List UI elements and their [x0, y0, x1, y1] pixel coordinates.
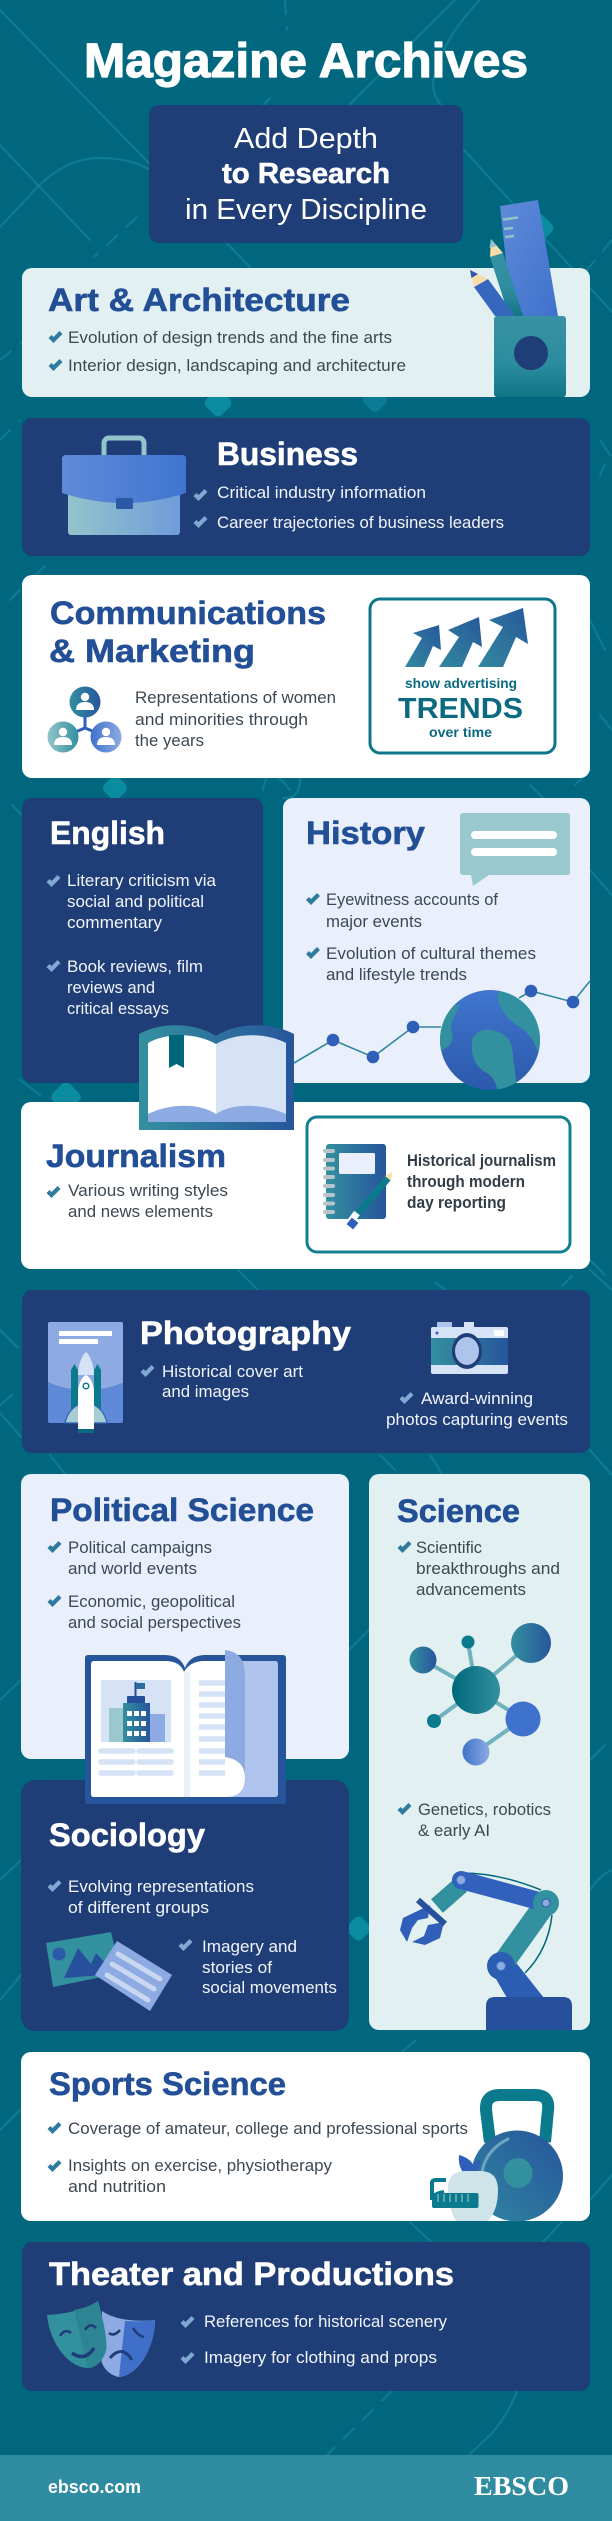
heading: photography: Photography [140, 1315, 351, 1351]
heading: english: English [50, 815, 165, 851]
heading: sports science: Sports Science [49, 2066, 286, 2102]
bullet: book reviews [46, 957, 203, 1018]
logo: EBSCO: EBSCO [474, 2471, 569, 2501]
bullet: breakthroughs: breakthroughs and [416, 1559, 560, 1578]
bullet: clothing and props: Imagery for clothing and props [204, 2348, 437, 2367]
heading: journalism: Journalism [46, 1138, 226, 1174]
bullet: design trends: Evolution of design trends and the fine arts [68, 328, 392, 347]
heading: communications and marketing [49, 595, 326, 669]
icon: open book with bookmark [139, 1025, 294, 1130]
bullet: career trajectories: Career trajectories of business leaders [217, 513, 504, 532]
icon: molecule [410, 1623, 551, 1766]
bullet: award-winning photos: photos capturing events [386, 1410, 568, 1429]
heading: political science: Political Science [50, 1492, 314, 1528]
bullet: eyewitness accounts: Eyewitness accounts of [326, 890, 498, 909]
bullet: book reviews: critical essays [67, 999, 169, 1018]
panel: sports science [21, 2052, 590, 2222]
bullet: genetics [398, 1800, 551, 1840]
bullet: eyewitness accounts [306, 890, 498, 931]
bullet: industry information: Critical industry information [217, 483, 426, 502]
heading: communications and marketing: & Marketing [49, 633, 255, 669]
panel: photography [16, 1290, 590, 1453]
bullet: exercise insights [48, 2156, 332, 2196]
subtitle box: in Every Discipline [185, 194, 427, 226]
icon: camera [431, 1322, 508, 1374]
panel: journalism [21, 1102, 590, 1269]
bullet: interior design: Interior design, landscaping and architecture [68, 356, 406, 375]
bullet: award-winning photos [386, 1389, 568, 1429]
callout: advertising trends: show advertising [405, 675, 517, 691]
icon: connected people [48, 686, 122, 752]
bullet: writing styles: Various writing styles [68, 1181, 228, 1200]
panel: science [369, 1474, 590, 2030]
bullet: book reviews: reviews and [67, 978, 155, 997]
heading: art and architecture: Art & Architecture [48, 282, 350, 318]
heading: theater and productions: Theater and Productions [49, 2256, 454, 2292]
bullet: exercise insights: and nutrition [68, 2177, 166, 2196]
bullet: coverage: Coverage of amateur, college and professional sports [68, 2119, 468, 2138]
text: historical journalism: day reporting [407, 1193, 506, 1212]
callout: advertising trends [370, 599, 555, 753]
bullet: writing styles: and news elements [68, 1202, 213, 1221]
bullet: social movements: Imagery and [202, 1937, 297, 1956]
text: representations [135, 688, 336, 750]
bullet: exercise insights: Insights on exercise, physiotherapy [68, 2156, 332, 2175]
panel: communications and marketing [22, 575, 590, 778]
bullet: breakthroughs: Scientific [416, 1538, 482, 1557]
line chart [294, 981, 590, 1063]
panel: history [283, 798, 590, 1095]
icon: pencil cup [470, 200, 566, 397]
icon: notebook and pen [325, 1144, 392, 1228]
text: representations: the years [135, 731, 204, 750]
bullet: representations: Evolving representations [68, 1877, 254, 1896]
heading: history: History [306, 815, 425, 851]
bullet: cover art: and images [162, 1382, 249, 1401]
bullet: writing styles [46, 1181, 228, 1221]
bullet: literary criticism: social and political [67, 892, 204, 911]
icon: robot arm [400, 1873, 572, 2030]
icon: rising arrows [405, 608, 528, 667]
callout: advertising trends: over time [429, 724, 492, 740]
bullet: historical scenery: References for historical scenery [204, 2312, 447, 2331]
icon: briefcase [62, 438, 186, 535]
bullet: cultural themes [306, 944, 536, 984]
heading: business: Business [217, 436, 358, 472]
bullet: perspectives: and social perspectives [68, 1613, 241, 1632]
bullet: social movements: social movements [202, 1978, 337, 1997]
heading: sociology: Sociology [49, 1817, 205, 1853]
bullet: genetics: Genetics, robotics [418, 1800, 551, 1819]
bullet: book reviews: Book reviews, film [67, 957, 203, 976]
bullet: genetics: & early AI [418, 1821, 490, 1840]
icon: speech bubble [460, 813, 570, 886]
bullet: literary criticism: Literary criticism via [67, 871, 217, 890]
bullet: award-winning photos: Award-winning [421, 1389, 533, 1408]
subtitle box [149, 105, 463, 243]
icon: open magazine [85, 1650, 286, 1804]
bullet: cover art: Historical cover art [162, 1362, 303, 1381]
bullet: eyewitness accounts: major events [326, 912, 422, 931]
subtitle box: Add Depth [234, 123, 378, 155]
title: Magazine Archives [84, 35, 528, 88]
bullet: cover art [140, 1362, 303, 1401]
panel: english [22, 798, 263, 1083]
icon: theater masks [47, 2301, 155, 2377]
bullet: campaigns: and world events [68, 1559, 197, 1578]
bullet: representations [48, 1877, 254, 1917]
subtitle box: to Research [222, 158, 390, 190]
text: representations: and minorities through [135, 710, 308, 729]
bullet: campaigns: Political campaigns [68, 1538, 212, 1557]
bullet: social movements [178, 1937, 337, 1997]
text: historical journalism: through modern [407, 1172, 525, 1191]
heading: communications and marketing: Communications [50, 595, 326, 631]
panel: art and architecture [22, 200, 590, 397]
bullet: representations: of different groups [68, 1898, 209, 1917]
callout: historical journalism [307, 1117, 570, 1252]
bullet: breakthroughs [398, 1538, 560, 1599]
bullet: campaigns [48, 1538, 212, 1578]
footer link: ebsco.com [48, 2477, 141, 2497]
icon: globe [440, 990, 540, 1090]
panel: theater and productions [22, 2242, 590, 2391]
panel: sociology [21, 1780, 349, 2031]
bullet: breakthroughs: advancements [416, 1580, 526, 1599]
panel: political science [21, 1474, 349, 1759]
bullet: perspectives: Economic, geopolitical [68, 1592, 235, 1611]
panel: business [22, 418, 590, 556]
heading: science: Science [397, 1493, 520, 1529]
callout: advertising trends: TRENDS [398, 693, 523, 725]
bullet: cultural themes: and lifestyle trends [326, 965, 467, 984]
icon: photo cards [46, 1932, 172, 2011]
text: historical journalism: Historical journalism [407, 1151, 556, 1170]
text: representations: Representations of women [135, 688, 336, 707]
text: historical journalism [407, 1151, 556, 1212]
footer [0, 2455, 612, 2521]
bullet: literary criticism [46, 871, 217, 932]
icon: rocket poster [48, 1322, 123, 1433]
icon: kettlebell and apple [432, 2095, 563, 2222]
bullet: cultural themes: Evolution of cultural themes [326, 944, 536, 963]
bullet: social movements: stories of [202, 1958, 272, 1977]
bullet: literary criticism: commentary [67, 913, 163, 932]
bullet: perspectives [48, 1592, 241, 1632]
